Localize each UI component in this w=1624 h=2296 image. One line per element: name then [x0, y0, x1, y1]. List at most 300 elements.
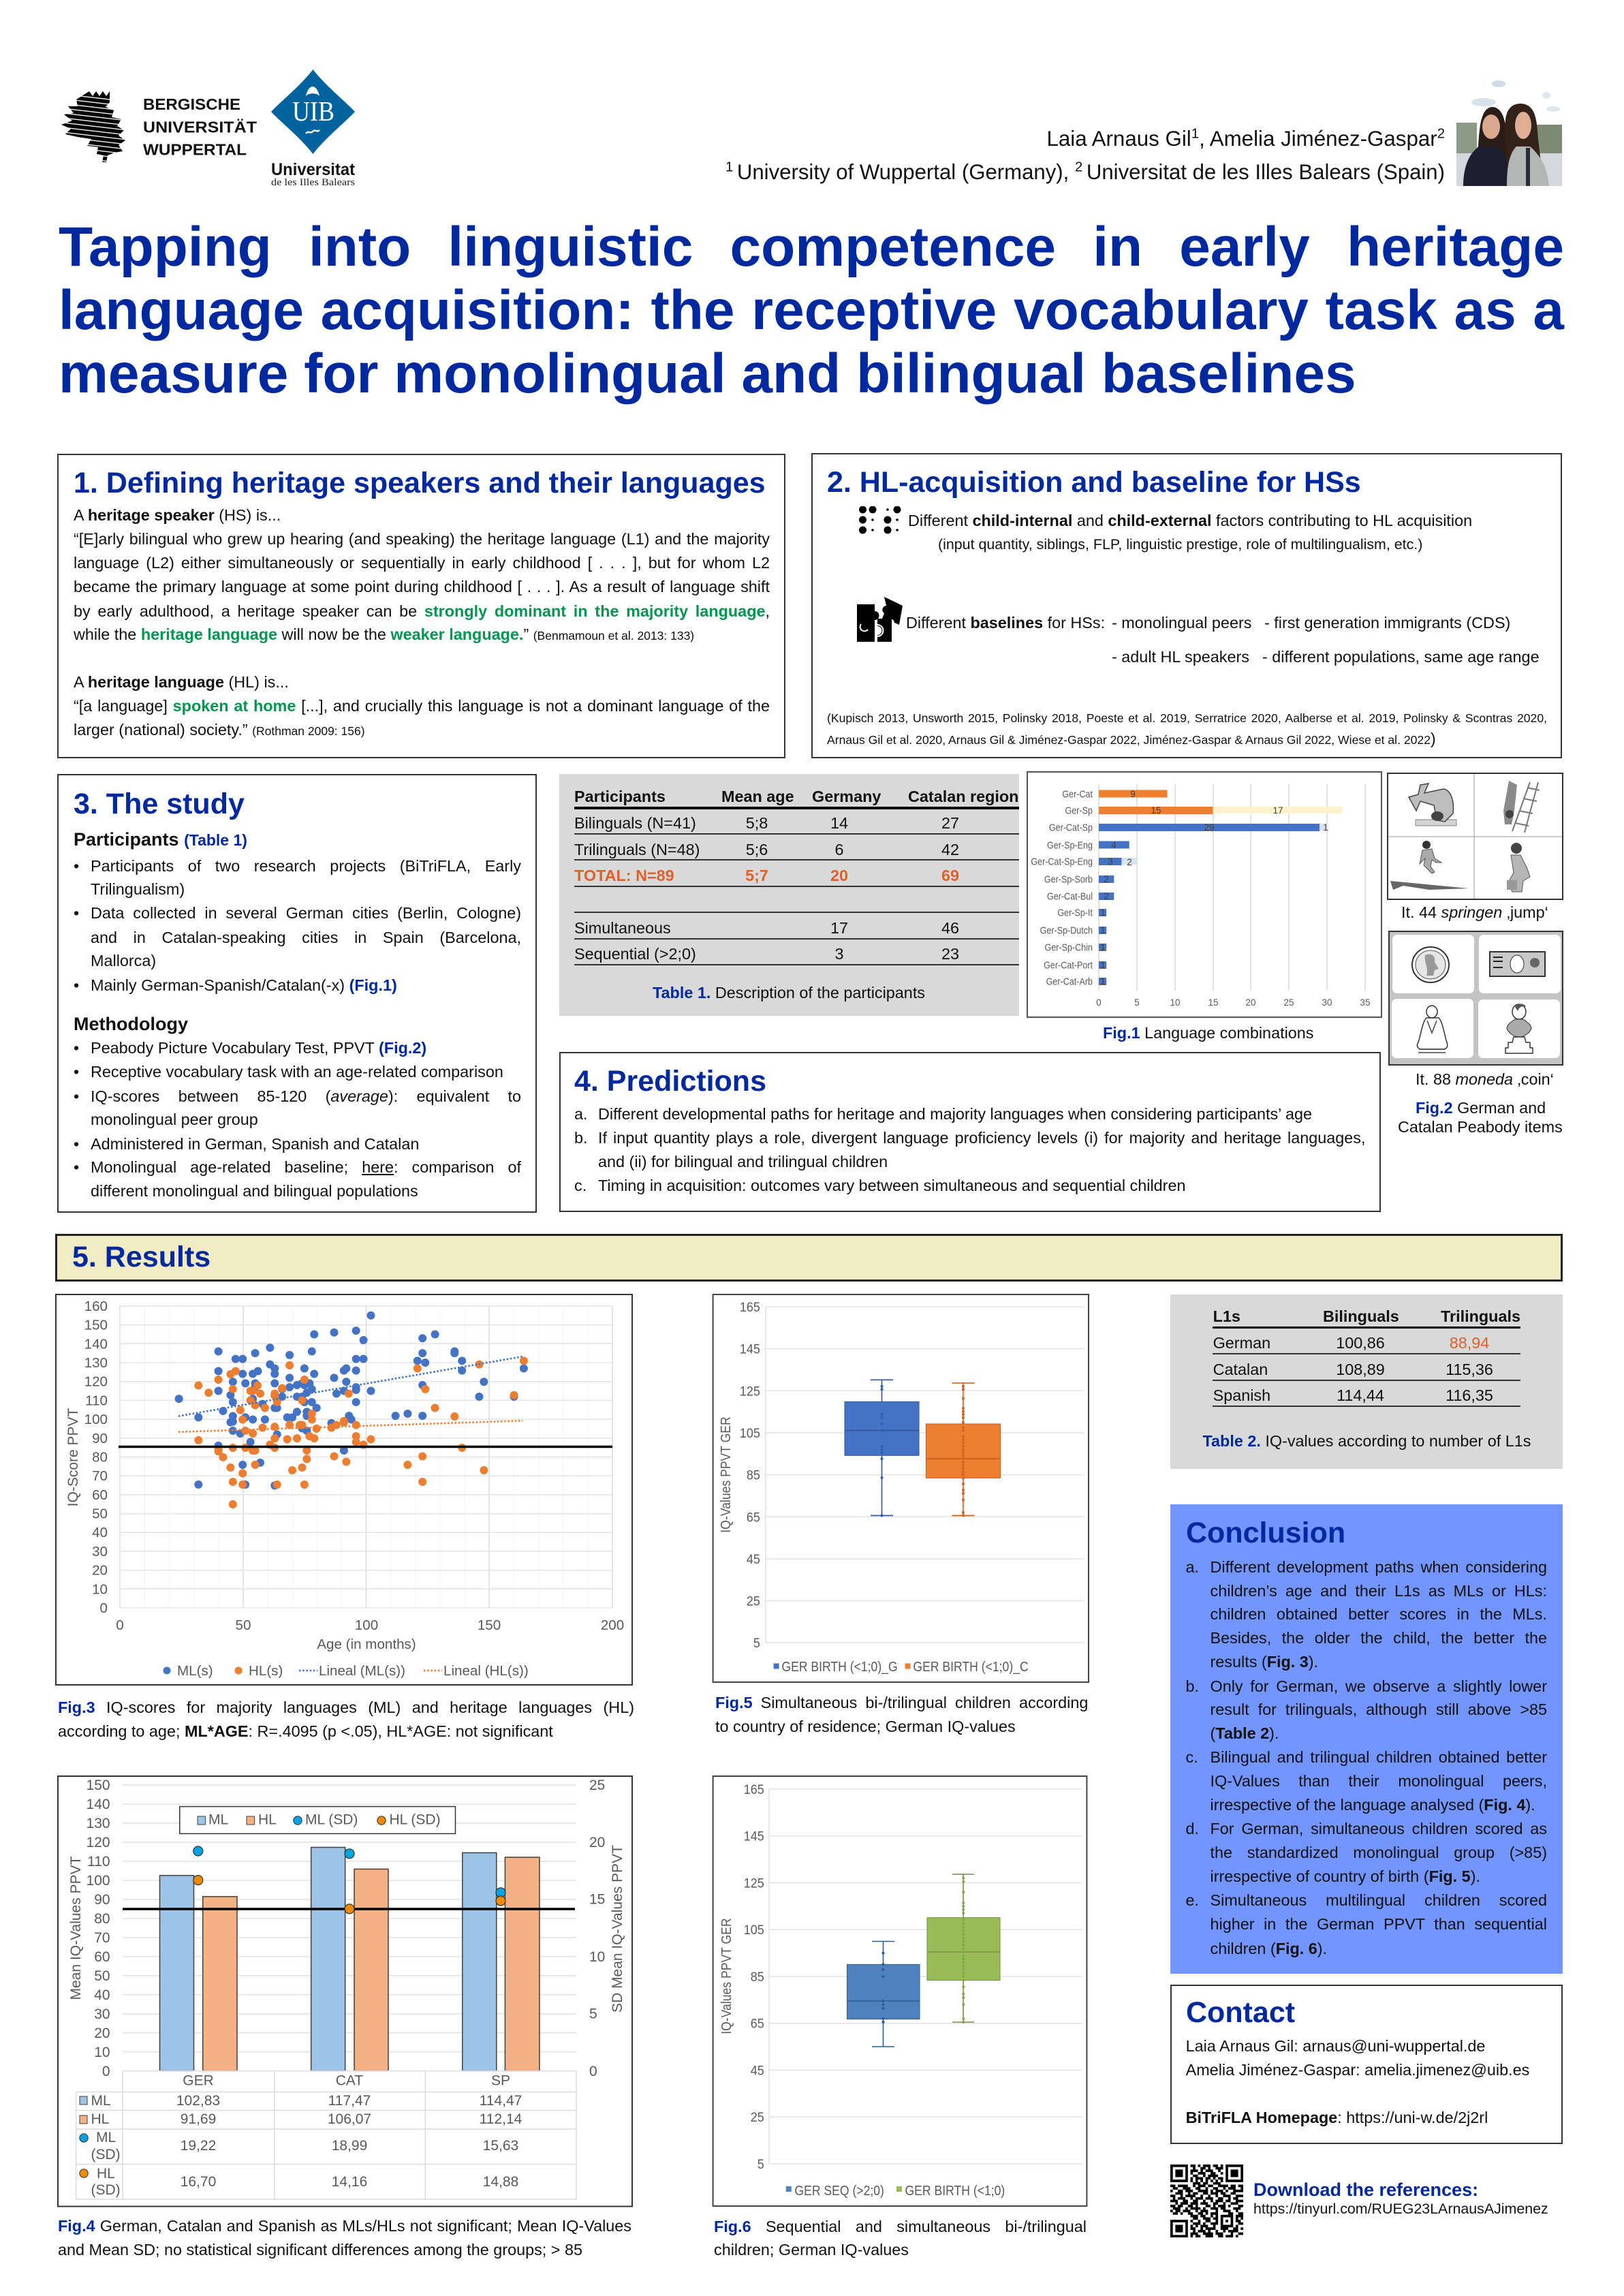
- caption: Fig.3: [58, 1698, 634, 1740]
- text block: heritage speaker definition: [74, 506, 770, 643]
- chart: Fig.4 mean IQ values bars with SD markers: 40: [94, 1987, 110, 2003]
- chart: Fig.1 language combinations: 1: [1100, 976, 1106, 987]
- table 2 data: 114,44: [1337, 1386, 1384, 1404]
- chart: Fig.1 language combinations: 2: [1104, 891, 1109, 901]
- chart: Fig.6 box plot sequential vs simultaneous: 25: [751, 2110, 764, 2124]
- chart: Fig.6 box plot sequential vs simultaneous: 145: [744, 1829, 764, 1844]
- contact details: Amelia Jiménez-Gaspar: amelia.jimenez@uib.es: [1186, 2061, 1529, 2079]
- chart: Fig.6 box plot sequential vs simultaneous: GER SEQ (>2;0): [794, 2183, 884, 2198]
- text block: methodology: •: [74, 1135, 79, 1153]
- text block: baselines: - first generation immigrants (CDS): [1264, 614, 1510, 632]
- table header: Participants: [574, 788, 666, 805]
- chart: Fig.1 language combinations: 15: [1208, 997, 1219, 1008]
- table header: Germany: [812, 788, 881, 805]
- caption: table 1: Table 1. Description of the participants: [653, 984, 925, 1002]
- chart: Fig.4 mean IQ values bars with SD markers: HL (SD): [390, 1812, 441, 1828]
- logo: Universitat de les Illes Balears: Universitat: [271, 160, 356, 179]
- table 2 data: Trilinguals: [1441, 1307, 1520, 1325]
- table 2 data: 100,86: [1336, 1334, 1385, 1352]
- logo: Bergische Universität Wuppertal: WUPPERTAL: [143, 140, 247, 158]
- table header: [574, 788, 1019, 809]
- table 2 data: German: [1213, 1334, 1270, 1352]
- chart: Fig.3 scatter plot of IQ scores by age: [56, 1294, 632, 1685]
- chart: Fig.4 mean IQ values bars with SD markers: 100: [87, 1873, 110, 1889]
- icon: puzzle pieces: [857, 597, 903, 642]
- authors and affiliations: 1 University of Wuppertal (Germany), 2 Universitat de les Illes Balears (Spain): [725, 159, 1445, 184]
- text block: participants: Mainly German-Spanish/Catalan(-x) (Fig.1): [91, 976, 397, 994]
- chart: Fig.4 mean IQ values bars with SD markers: 5: [589, 2006, 597, 2022]
- chart: Fig.3 scatter plot of IQ scores by age: 100: [355, 1617, 378, 1633]
- conclusion list: a.: [1185, 1558, 1199, 1576]
- data table: CAT: [336, 2073, 363, 2089]
- chart: Fig.3 scatter plot of IQ scores by age: 30: [92, 1544, 108, 1560]
- chart: Fig.4 mean IQ values bars with SD markers: Mean IQ-Values PPVT: [68, 1856, 84, 2000]
- text block: baselines: - different populations, same age range: [1262, 648, 1540, 666]
- text block: methodology: Administered in German, Spanish and Catalan: [91, 1135, 419, 1153]
- chart: Fig.3 scatter plot of IQ scores by age: 0: [116, 1617, 124, 1633]
- text block: participants: [74, 829, 521, 994]
- chart: Fig.1 language combinations: 29: [1204, 822, 1215, 833]
- title: language acquisition: the receptive vocabulary task as a: [59, 279, 1564, 341]
- text block: predictions list: Different developmental paths for heritage and majority languages when considering participants’ age: [598, 1105, 1312, 1123]
- table rows: Sequential (>2;0): [574, 945, 696, 963]
- contact details: [1185, 2037, 1529, 2126]
- conclusion list: Different development paths when considering: [1210, 1558, 1547, 1576]
- data table: 14,16: [332, 2174, 367, 2190]
- caption: Fig.4: and Mean SD; no statistical significant differences among the groups; > 85: [58, 2241, 582, 2259]
- text block: predictions list: and (ii) for bilingual and trilingual children: [598, 1153, 888, 1170]
- caption: item 88: It. 88 moneda ‚coin‘: [1416, 1070, 1554, 1088]
- table rows: 42: [941, 841, 959, 858]
- chart: Fig.1 language combinations: 5: [1134, 997, 1140, 1008]
- chart: Fig.3 scatter plot of IQ scores by age: 70: [92, 1468, 108, 1484]
- data table: 117,47: [328, 2093, 371, 2109]
- chart: Fig.3 scatter plot of IQ scores by age: 130: [84, 1355, 108, 1371]
- text block: participants: Mallorca): [91, 952, 156, 969]
- table 2 data: 88,94: [1450, 1334, 1489, 1352]
- text block: participants: Participants of two research projects (BiTriFLA, Early: [91, 857, 521, 875]
- text block: heritage language definition: [74, 673, 770, 739]
- chart: Fig.1 language combinations: 35: [1360, 997, 1371, 1008]
- caption: Fig.2: Catalan Peabody items: [1398, 1118, 1563, 1136]
- logo: Bergische Universität Wuppertal: BERGISCHE: [143, 95, 240, 113]
- text block: baselines: - adult HL speakers: [1112, 648, 1249, 666]
- caption: Fig.5: to country of residence; German IQ-values: [715, 1718, 1016, 1735]
- data table: ML: [96, 2130, 116, 2145]
- text block: methodology: •: [74, 1063, 79, 1081]
- text block: factors: (input quantity, siblings, FLP, linguistic prestige, role of multilingualism, etc.): [938, 536, 1422, 553]
- caption: Fig.6: Fig.6 Sequential and simultaneous bi-/trilingual: [714, 2218, 1087, 2235]
- text block: heritage speaker definition: A heritage speaker (HS) is...: [74, 506, 281, 524]
- caption: Fig.2: [1398, 1099, 1563, 1136]
- section heading: 5. results: [55, 1234, 1563, 1282]
- caption: item 44: It. 44 springen ‚jump‘: [1401, 903, 1548, 921]
- conclusion list: e.: [1185, 1891, 1199, 1909]
- table rows: 23: [941, 945, 959, 963]
- panel: 1. defining heritage speakers: [57, 454, 785, 758]
- text block: heritage language definition: “[a language] spoken at home [...], and crucially this language is not a dominant language of the: [74, 697, 770, 715]
- title: Tapping into linguistic competence in early heritage: [59, 216, 1564, 278]
- data table: SP: [491, 2073, 510, 2089]
- chart: Fig.4 mean IQ values bars with SD markers: 0: [102, 2064, 110, 2079]
- chart: Fig.3 scatter plot of IQ scores by age: IQ-Score PPVT: [65, 1408, 81, 1506]
- text block: methodology: different monolingual and bilingual populations: [91, 1182, 418, 1200]
- panel: conclusion: [1170, 1504, 1563, 1974]
- chart: Fig.5 box plot by country of residence: 85: [747, 1468, 760, 1483]
- chart: Fig.4 mean IQ values bars with SD markers: 140: [87, 1797, 110, 1812]
- chart: Fig.1 language combinations: 2: [1104, 874, 1109, 884]
- data table: GER: [183, 2073, 214, 2089]
- chart: Fig.1 language combinations: 1: [1100, 960, 1106, 970]
- heading: 2. HL-acquisition and baseline for HSs: [827, 466, 1361, 499]
- logo: Universitat de les Illes Balears: [271, 69, 356, 188]
- chart: Fig.4 mean IQ values bars with SD markers: 110: [87, 1854, 110, 1870]
- conclusion list: b.: [1185, 1677, 1199, 1695]
- data table: 91,69: [181, 2111, 216, 2127]
- text block: heritage language definition: A heritage language (HL) is...: [74, 673, 289, 691]
- text block: predictions list: If input quantity plays a role, divergent language proficiency levels (i) for majority and heritage languages,: [598, 1129, 1365, 1147]
- chart: Fig.1 language combinations: Ger-Cat-Bul: [1047, 891, 1093, 902]
- chart: Fig.1 language combinations: 1: [1100, 925, 1106, 935]
- text block: methodology: •: [74, 1158, 79, 1176]
- caption: Fig.1: Fig.1 Language combinations: [1103, 1024, 1313, 1042]
- text block: baselines: - monolingual peers: [1112, 614, 1251, 632]
- text block: methodology: monolingual peer group: [91, 1111, 258, 1128]
- caption: table 2: Table 2. IQ-values according to number of L1s: [1203, 1432, 1531, 1450]
- chart: Fig.3 scatter plot of IQ scores by age: 40: [92, 1525, 108, 1540]
- table header: Catalan region: [908, 788, 1018, 805]
- chart: Fig.5 box plot by country of residence: 165: [740, 1299, 760, 1314]
- authors and affiliations: [725, 126, 1445, 184]
- data table: ML: [91, 2093, 111, 2109]
- chart: Fig.6 box plot sequential vs simultaneous: 65: [751, 2016, 764, 2031]
- data table: 106,07: [328, 2111, 371, 2127]
- heading: 1. Defining heritage speakers and their languages: [74, 467, 766, 499]
- caption: Fig.3: according to age; ML*AGE: R=.4095 (p <.05), HL*AGE: not significant: [58, 1722, 553, 1740]
- chart: Fig.1 language combinations: [1027, 772, 1381, 1017]
- conclusion list: IQ-Values than their monolingual peers,: [1210, 1772, 1547, 1790]
- chart: Fig.6 box plot sequential vs simultaneous: 85: [751, 1969, 764, 1984]
- conclusion list: result for trilinguals, although still above >85: [1210, 1701, 1547, 1718]
- chart: Fig.1 language combinations: 10: [1170, 997, 1181, 1008]
- conclusion list: results (Fig. 3).: [1210, 1653, 1318, 1671]
- table rows: 14: [830, 814, 848, 832]
- panel: 4. predictions: [559, 1052, 1381, 1212]
- logo: Universitat de les Illes Balears: UIB: [292, 95, 334, 127]
- caption: Fig.5: Fig.5 Simultaneous bi-/trilingual children according: [715, 1694, 1088, 1711]
- table rows: 17: [830, 919, 848, 937]
- text block: heritage speaker definition: “[E]arly bilingual who grew up hearing (and speaking) the heritage language (L1) and the majority: [74, 530, 770, 548]
- chart: Fig.5 box plot by country of residence: GER BIRTH (<1;0)_G: [781, 1659, 898, 1675]
- text block: participants: Data collected in several German cities (Berlin, Cologne): [91, 904, 521, 922]
- table 2 data: Spanish: [1213, 1386, 1270, 1404]
- chart: Fig.4 mean IQ values bars with SD markers: ML: [208, 1812, 228, 1828]
- references: (Kupisch 2013, Unsworth 2015, Polinsky 2018, Poeste et al. 2019, Serratrice 2020, Aalberse et al. 2019, Polinsky & Scontras 2020,: [827, 711, 1547, 725]
- text block: heritage speaker definition: language (L2) either simultaneously or sequentially in early childhood [ . . . ], but for whom L2: [74, 554, 770, 572]
- chart: Fig.4 mean IQ values bars with SD markers: 70: [94, 1930, 110, 1946]
- text block: factors: [908, 512, 1472, 553]
- chart: Fig.5 box plot by country of residence: 125: [740, 1384, 760, 1398]
- table rows: 5;8: [746, 814, 768, 832]
- chart: Fig.1 language combinations: 25: [1283, 997, 1294, 1008]
- panel: 3. the study: [57, 774, 537, 1213]
- chart: Fig.4 mean IQ values bars with SD markers: 130: [87, 1816, 110, 1831]
- authors and affiliations: Laia Arnaus Gil1, Amelia Jiménez-Gaspar2: [1046, 126, 1445, 151]
- title: measure for monolingual and bilingual baselines: [59, 343, 1356, 405]
- chart: Fig.1 language combinations: 1: [1323, 822, 1328, 833]
- chart: Fig.5 box plot by country of residence: 105: [740, 1425, 760, 1440]
- text block: heritage speaker definition: became the primary language at some point during childhood [ . . . ]. As a result of language shift: [74, 578, 770, 595]
- chart: Fig.4 mean IQ values bars with SD markers: ML (SD): [305, 1812, 358, 1828]
- table rows: TOTAL: N=89: [574, 867, 674, 884]
- text block: heritage speaker definition: while the heritage language will now be the weaker language.” (Benmamoun et al. 2013: 133): [74, 625, 694, 643]
- conclusion list: (Table 2).: [1210, 1724, 1279, 1742]
- text block: methodology: IQ-scores between 85-120 (average): equivalent to: [91, 1087, 521, 1105]
- chart: Fig.3 scatter plot of IQ scores by age: 150: [478, 1617, 501, 1633]
- chart: Fig.1 language combinations: 15: [1151, 805, 1161, 816]
- caption: Fig.4: Fig.4 German, Catalan and Spanish as MLs/HLs not significant; Mean IQ-Values: [58, 2217, 631, 2235]
- logo: Bergische Universität Wuppertal: [61, 91, 257, 164]
- chart: Fig.4 mean IQ values bars with SD markers: SD Mean IQ-Values PPVT: [610, 1845, 625, 2013]
- heading: 3. The study: [74, 788, 245, 820]
- conclusion list: children (Fig. 6).: [1210, 1940, 1327, 1957]
- icon: dots: [859, 506, 901, 534]
- contact details: BiTriFLA Homepage: https://uni-w.de/2j2rl: [1186, 2109, 1488, 2126]
- conclusion list: Besides, the older the child, the better the: [1210, 1629, 1547, 1647]
- panel: contact: [1170, 1985, 1563, 2144]
- chart: Fig.4 mean IQ values bars with SD markers: 20: [94, 2026, 110, 2041]
- conclusion list: higher in the German PPVT than sequential: [1210, 1915, 1547, 1933]
- chart: Fig.3 scatter plot of IQ scores by age: 120: [84, 1374, 108, 1390]
- data table: 15,63: [483, 2138, 518, 2154]
- chart: Fig.4 mean IQ values bars with SD markers: [58, 1776, 632, 2206]
- chart: Fig.1 language combinations: 9: [1130, 789, 1136, 799]
- chart: Fig.4 mean IQ values bars with SD markers: 50: [94, 1968, 110, 1984]
- download the references: Download the references:: [1253, 2179, 1478, 2200]
- data table: 112,14: [480, 2111, 522, 2127]
- chart: Fig.1 language combinations: 20: [1245, 997, 1256, 1008]
- data table: 18,99: [332, 2138, 367, 2154]
- chart: Fig.4 mean IQ values bars with SD markers: 20: [589, 1835, 605, 1850]
- chart: Fig.1 language combinations: Ger-Sp: [1065, 805, 1093, 816]
- chart: Fig.1 language combinations: Ger-Cat-Arb: [1046, 976, 1093, 987]
- table 2 data: 115,36: [1446, 1361, 1493, 1378]
- caption: Fig.4: [58, 2217, 631, 2259]
- data table: 14,88: [483, 2174, 518, 2190]
- chart: Fig.4 mean IQ values bars with SD markers: 30: [94, 2006, 110, 2022]
- chart: Fig.1 language combinations: Ger-Cat-Sp-Eng: [1031, 856, 1093, 867]
- heading: Contact: [1186, 1996, 1295, 2029]
- chart: Fig.3 scatter plot of IQ scores by age: 60: [92, 1487, 108, 1503]
- panel: 2. HL acquisition and baseline: [811, 453, 1562, 758]
- chart: Fig.1 language combinations: Ger-Sp-Eng: [1047, 840, 1093, 851]
- text block: predictions list: Timing in acquisition: outcomes vary between simultaneous and sequential children: [598, 1177, 1185, 1194]
- table rows: 5;6: [746, 841, 768, 858]
- title: [59, 216, 1564, 405]
- table rows: [574, 814, 1019, 965]
- data table: (SD): [91, 2182, 121, 2198]
- table 2 data: 116,35: [1446, 1386, 1493, 1404]
- logo: Universitat de les Illes Balears: de les Illes Balears: [271, 177, 355, 188]
- chart: Fig.4 mean IQ values bars with SD markers: 0: [589, 2064, 597, 2079]
- table 2 data: [1213, 1307, 1520, 1407]
- chart: Fig.3 scatter plot of IQ scores by age: 0: [100, 1600, 108, 1616]
- conclusion list: For German, simultaneous children scored as: [1210, 1820, 1547, 1837]
- chart: Fig.4 mean IQ values bars with SD markers: 80: [94, 1911, 110, 1927]
- photo: the two authors: [1456, 80, 1562, 186]
- chart: Fig.4 mean IQ values bars with SD markers: 120: [87, 1835, 110, 1850]
- panel: table 2 IQ values by number of L1s: [1170, 1294, 1563, 1469]
- chart: Fig.5 box plot by country of residence: 5: [753, 1635, 760, 1650]
- chart: Fig.1 language combinations: 30: [1322, 997, 1332, 1008]
- text block: participants: •: [74, 976, 79, 994]
- QR code: [1170, 2166, 1243, 2236]
- chart: Fig.1 language combinations: Ger-Sp-It: [1057, 907, 1093, 918]
- data table: (SD): [91, 2147, 121, 2162]
- data table: 102,83: [176, 2093, 220, 2109]
- table rows: 3: [834, 945, 844, 963]
- chart: Fig.3 scatter plot of IQ scores by age: 50: [236, 1617, 251, 1633]
- chart: Fig.3 scatter plot of IQ scores by age: 80: [92, 1450, 108, 1465]
- image: Peabody item 88 moneda: [1389, 931, 1563, 1065]
- chart: Fig.3 scatter plot of IQ scores by age: Age (in months): [317, 1636, 416, 1652]
- caption: Fig.2: Fig.2 German and: [1416, 1099, 1546, 1117]
- data table: HL: [91, 2111, 109, 2127]
- chart: Fig.5 box plot by country of residence: 45: [747, 1551, 760, 1566]
- chart: Fig.1 language combinations: Ger-Cat-Port: [1044, 960, 1093, 971]
- chart: Fig.5 box plot by country of residence: [713, 1294, 1089, 1682]
- table header: Mean age: [721, 788, 794, 805]
- table rows: 5;7: [745, 867, 768, 884]
- caption: Fig.6: [714, 2218, 1087, 2259]
- table rows: Bilinguals (N=41): [574, 814, 696, 832]
- chart: Fig.3 scatter plot of IQ scores by age: Lineal (HL(s)): [443, 1663, 529, 1679]
- chart: Fig.3 scatter plot of IQ scores by age: Lineal (ML(s)): [319, 1663, 405, 1679]
- chart: Fig.4 mean IQ values bars with SD markers: 60: [94, 1949, 110, 1965]
- chart: Fig.3 scatter plot of IQ scores by age: 90: [92, 1431, 108, 1446]
- chart: Fig.6 box plot sequential vs simultaneous: 45: [751, 2063, 764, 2078]
- text block: predictions list: [574, 1105, 1365, 1194]
- text block: methodology: Peabody Picture Vocabulary Test, PPVT (Fig.2): [91, 1039, 426, 1057]
- chart: Fig.1 language combinations: Ger-Sp-Sorb: [1044, 874, 1093, 885]
- text block: predictions list: c.: [574, 1177, 587, 1194]
- chart: Fig.6 box plot sequential vs simultaneous: [713, 1776, 1087, 2206]
- conclusion list: children’s age and their L1s as MLs or HLs:: [1210, 1582, 1547, 1600]
- chart: Fig.4 mean IQ values bars with SD markers: HL: [258, 1812, 277, 1828]
- text block: methodology: Methodology: [74, 1014, 188, 1034]
- references: Arnaus Gil et al. 2020, Arnaus Gil & Jiménez-Gaspar 2022, Jiménez-Gaspar & Arnaus Gil 2022, Wiese et al. 2022): [827, 730, 1436, 747]
- text block: participants: •: [74, 857, 79, 875]
- chart: Fig.3 scatter plot of IQ scores by age: 110: [85, 1393, 108, 1408]
- table 2 data: Catalan: [1213, 1361, 1268, 1378]
- table 2 data: 108,89: [1336, 1361, 1385, 1378]
- text block: methodology: Monolingual age-related baseline; here: comparison of: [91, 1158, 521, 1176]
- chart: Fig.5 box plot by country of residence: 65: [747, 1510, 760, 1524]
- text block: methodology: •: [74, 1087, 79, 1105]
- caption: Fig.5: [715, 1694, 1088, 1735]
- chart: Fig.4 mean IQ values bars with SD markers: 10: [589, 1949, 605, 1965]
- chart: Fig.3 scatter plot of IQ scores by age: ML(s): [177, 1663, 213, 1679]
- chart: Fig.1 language combinations: 17: [1272, 805, 1283, 816]
- heading: Conclusion: [1186, 1517, 1345, 1549]
- download the references: https://tinyurl.com/RUEG23LArnausAJimenez: [1253, 2201, 1548, 2217]
- download the references: [1253, 2179, 1548, 2217]
- contact details: Laia Arnaus Gil: arnaus@uni-wuppertal.de: [1186, 2037, 1485, 2055]
- chart: Fig.3 scatter plot of IQ scores by age: 200: [601, 1617, 624, 1633]
- text block: heritage language definition: larger (national) society.” (Rothman 2009: 156): [74, 721, 365, 739]
- text block: participants: Participants (Table 1): [74, 829, 247, 850]
- data table: [76, 2071, 576, 2199]
- data table: 114,47: [480, 2093, 522, 2109]
- text block: predictions list: b.: [574, 1129, 588, 1147]
- text block: heritage speaker definition: by early adulthood, a heritage speaker can be strongly dominant in the majority language,: [74, 602, 770, 620]
- chart: Fig.3 scatter plot of IQ scores by age: 150: [84, 1318, 108, 1333]
- chart: Fig.6 box plot sequential vs simultaneous: 5: [758, 2156, 764, 2171]
- conclusion list: Bilingual and trilingual children obtained better: [1210, 1748, 1547, 1766]
- chart: Fig.1 language combinations: Ger-Sp-Chin: [1045, 942, 1093, 953]
- chart: Fig.6 box plot sequential vs simultaneous: GER BIRTH (<1;0): [905, 2183, 1005, 2198]
- chart: Fig.3 scatter plot of IQ scores by age: 100: [84, 1412, 108, 1427]
- text block: participants: •: [74, 904, 79, 922]
- panel: table 1 participants: [559, 774, 1019, 1016]
- data table: HL: [97, 2166, 115, 2182]
- chart: Fig.4 mean IQ values bars with SD markers: 25: [589, 1778, 605, 1793]
- chart: Fig.4 mean IQ values bars with SD markers: 90: [94, 1892, 110, 1908]
- section heading: 5. results: 5. Results: [72, 1241, 210, 1273]
- image: Peabody item 44 springen: [1388, 773, 1563, 899]
- chart: Fig.1 language combinations: 2: [1127, 857, 1132, 867]
- table rows: Trilinguals (N=48): [574, 841, 700, 858]
- text block: baselines: [906, 614, 1540, 666]
- chart: Fig.6 box plot sequential vs simultaneous: 105: [744, 1923, 764, 1937]
- text block: methodology: [74, 1014, 522, 1200]
- conclusion list: c.: [1185, 1748, 1198, 1766]
- text block: baselines: Different baselines for HSs:: [906, 614, 1105, 632]
- chart: Fig.4 mean IQ values bars with SD markers: 10: [94, 2045, 110, 2060]
- chart: Fig.4 mean IQ values bars with SD markers: 15: [589, 1891, 605, 1908]
- caption: Fig.3: Fig.3 IQ-scores for majority languages (ML) and heritage languages (HL): [58, 1698, 634, 1716]
- chart: Fig.6 box plot sequential vs simultaneous: IQ-Values PPVT GER: [719, 1918, 734, 2034]
- chart: Fig.6 box plot sequential vs simultaneous: 125: [744, 1876, 764, 1891]
- chart: Fig.1 language combinations: Ger-Cat-Sp: [1049, 822, 1093, 833]
- chart: Fig.4 mean IQ values bars with SD markers: 150: [87, 1778, 110, 1793]
- conclusion list: irrespective of the language analysed (Fig. 4).: [1210, 1796, 1535, 1814]
- chart: Fig.1 language combinations: 3: [1108, 856, 1113, 867]
- chart: Fig.3 scatter plot of IQ scores by age: 140: [84, 1336, 108, 1352]
- chart: Fig.5 box plot by country of residence: 25: [747, 1594, 760, 1609]
- chart: Fig.1 language combinations: 0: [1096, 997, 1102, 1008]
- table rows: Simultaneous: [574, 919, 671, 937]
- chart: Fig.3 scatter plot of IQ scores by age: 10: [92, 1581, 108, 1597]
- chart: Fig.3 scatter plot of IQ scores by age: HL(s): [249, 1663, 283, 1679]
- conclusion list: children obtained better scores in the MLs.: [1210, 1605, 1547, 1623]
- chart: Fig.5 box plot by country of residence: 145: [740, 1341, 760, 1356]
- chart: Fig.5 box plot by country of residence: GER BIRTH (<1;0)_C: [913, 1659, 1029, 1675]
- references: [827, 711, 1547, 747]
- chart: Fig.1 language combinations: Ger-Cat: [1062, 789, 1093, 800]
- table rows: 6: [834, 841, 844, 858]
- text block: participants: and in Catalan-speaking cities in Spain (Barcelona,: [91, 929, 521, 946]
- text block: participants: Trilingualism): [91, 880, 185, 898]
- chart: Fig.3 scatter plot of IQ scores by age: 50: [92, 1506, 108, 1522]
- conclusion list: Simultaneous multilingual children scored: [1210, 1891, 1547, 1909]
- conclusion list: irrespective of country of birth (Fig. 5).: [1210, 1867, 1480, 1885]
- table rows: 69: [941, 867, 959, 884]
- text block: factors: Different child-internal and child-external factors contributing to HL acquisition: [908, 512, 1472, 529]
- chart: Fig.1 language combinations: 1: [1100, 942, 1106, 952]
- conclusion list: Only for German, we observe a slightly lower: [1210, 1677, 1547, 1695]
- chart: Fig.5 box plot by country of residence: IQ-Values PPVT GER: [718, 1416, 733, 1533]
